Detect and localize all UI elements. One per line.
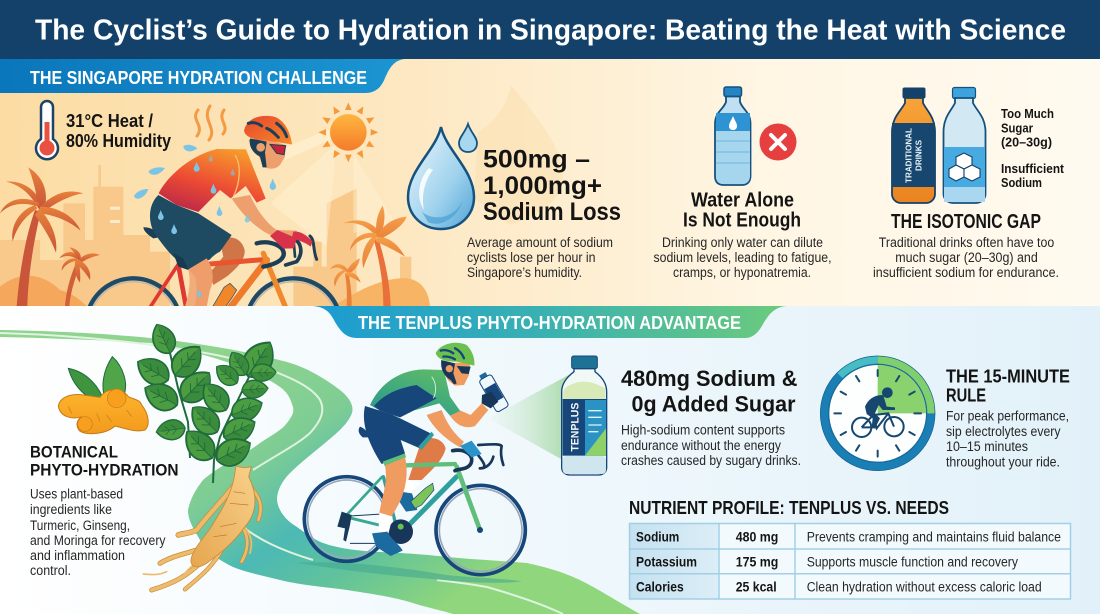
text: botanical phyto-hydration: Turmeric, Ginseng, [30, 518, 130, 533]
text: sodium and sugar: 480mg Sodium & [621, 366, 798, 391]
sugar bottle [944, 88, 986, 203]
text: water alone is not enough: cramps, or hyponatremia. [673, 265, 811, 280]
row: sodium: 480 mg [736, 528, 778, 544]
bike wheels [88, 276, 339, 306]
orange bottle [892, 88, 935, 203]
rear leg [209, 238, 245, 285]
row: potassium: Potassium [636, 554, 697, 570]
text: botanical phyto-hydration [30, 442, 178, 578]
rear arm [427, 410, 464, 447]
text: sodium and sugar: endurance without the energy [621, 438, 781, 453]
panel: Singapore hydration challenge [0, 102, 430, 374]
stat: sodium loss: Sodium Loss [483, 198, 621, 226]
text: sodium and sugar [621, 366, 801, 468]
bottle on frame [212, 282, 237, 306]
row: sodium: Sodium [636, 528, 679, 544]
row: potassium: Supports muscle function and recovery [807, 554, 1018, 570]
icon: moringa branches [132, 320, 281, 483]
text: sodium and sugar: 0g Added Sugar [632, 392, 796, 416]
winding road [0, 330, 640, 614]
bottle annotations: Too Much [1001, 106, 1054, 121]
text: botanical phyto-hydration: Uses plant-based [30, 486, 123, 502]
text: the 15-minute rule: 10–15 minutes [946, 439, 1028, 454]
text: the isotonic gap [873, 211, 1059, 280]
title: The Cyclist’s Guide to Hydration in Singapore: Beating the Heat with Science [35, 14, 1066, 46]
arm [232, 195, 300, 238]
rear leg [408, 438, 446, 480]
text: the 15-minute rule: For peak performance, [946, 408, 1069, 424]
illustration: cyclist drinking [297, 343, 525, 583]
icon: sodium droplets [408, 124, 477, 229]
stat: sodium loss: cyclists lose per hour in [467, 250, 596, 265]
bike wheels [304, 477, 525, 575]
text: the 15-minute rule [946, 366, 1070, 470]
orange bottle: DRINKS [914, 140, 924, 171]
sweat drops [134, 145, 276, 297]
stat: sodium loss: 1,000mg+ [483, 172, 602, 200]
text: water alone is not enough: Is Not Enough [683, 210, 801, 232]
helmet [244, 116, 292, 144]
icon: sun [318, 102, 378, 162]
text: botanical phyto-hydration: PHYTO-HYDRATION [30, 460, 178, 480]
text: botanical phyto-hydration: and Moringa for recovery [30, 533, 166, 548]
bike frame [148, 253, 287, 310]
cyclist silhouette [852, 387, 904, 437]
table: nutrient profile [630, 524, 1070, 599]
handlebars [453, 444, 503, 471]
jersey [370, 369, 461, 417]
text: botanical phyto-hydration: and inflammation [30, 548, 125, 563]
head [248, 138, 286, 169]
text: water alone is not enough: Water Alone [691, 190, 794, 212]
banner: Tenplus advantage: THE TENPLUS PHYTO-HYDRATION ADVANTAGE [358, 313, 741, 333]
text: botanical phyto-hydration: BOTANICAL [30, 442, 118, 462]
stat: sodium loss: Singapore’s humidity. [467, 265, 582, 280]
banner: Singapore hydration challenge: THE SINGAPORE HYDRATION CHALLENGE [30, 68, 367, 88]
bottle annotations: (20–30g) [1001, 134, 1052, 150]
icon: ginseng root [143, 466, 261, 590]
text: botanical phyto-hydration: control. [30, 563, 71, 578]
text: the 15-minute rule: sip electrolytes every [946, 424, 1061, 439]
stat: sodium loss: 500mg – [483, 146, 590, 174]
icon: right palm trees [330, 206, 407, 306]
text: the 15-minute rule: RULE [946, 386, 986, 406]
stat: heat and humidity: 80% Humidity [66, 131, 171, 151]
row: calories: Clean hydration without excess caloric load [807, 579, 1042, 594]
text: water alone is not enough: sodium levels, leading to fatigue, [654, 250, 832, 265]
icon: traditional drink bottles [892, 88, 1065, 203]
text: botanical phyto-hydration: ingredients like [30, 502, 112, 517]
row: calories: 25 kcal [736, 578, 777, 594]
text: water alone is not enough: Drinking only water can dilute [662, 235, 823, 250]
banner: Singapore hydration challenge [0, 59, 405, 93]
text: water alone is not enough [654, 190, 832, 280]
text: the isotonic gap: THE ISOTONIC GAP [891, 211, 1041, 233]
shorts [150, 195, 232, 270]
panel: Tenplus phyto-hydration advantage [0, 306, 1070, 614]
decorative soft flame [474, 85, 563, 225]
helmet [436, 343, 474, 366]
icon: 15-minute clock [820, 356, 935, 471]
heading: nutrient profile: NUTRIENT PROFILE: TENPLUS VS. NEEDS [629, 498, 949, 518]
row: calories: Calories [636, 578, 684, 594]
front arm with bottle [450, 403, 488, 427]
scene: city skyline, palms and sun [0, 102, 430, 306]
front leg [184, 258, 213, 310]
icon: large palm tree [0, 167, 83, 306]
illustration: cyclist in heat [88, 116, 339, 306]
bottle annotations: Sodium [1001, 175, 1042, 190]
handlebars [257, 236, 317, 267]
icon: turmeric [58, 357, 148, 434]
bottle annotations: Insufficient [1001, 161, 1065, 176]
stat: sodium loss: Average amount of sodium [467, 235, 613, 250]
orange bottle: TRADITIONAL [904, 128, 914, 183]
icon: thermometer [36, 101, 58, 159]
saddle [143, 227, 158, 238]
icon: Tenplus bottle with beam [488, 356, 607, 475]
handheld bottle [476, 370, 509, 413]
text: the isotonic gap: Traditional drinks often have too [879, 235, 1054, 250]
row: sodium [636, 528, 1061, 544]
icon: water bottle with cross [715, 87, 796, 185]
section background: Tenplus advantage [0, 306, 1100, 614]
text: the 15-minute rule: throughout your ride. [946, 454, 1060, 470]
stat: sodium loss [467, 146, 621, 280]
icon: Tenplus bottle with beam: TENPLUS [570, 403, 582, 452]
row: potassium [636, 554, 1018, 570]
jersey [159, 149, 266, 212]
row: potassium: 175 mg [736, 554, 778, 570]
shorts and front leg [364, 406, 431, 464]
head [442, 363, 470, 386]
row: sodium: Prevents cramping and maintains fluid balance [807, 530, 1061, 544]
icon: heat waves [196, 106, 225, 140]
icon: small palm tree [59, 247, 100, 306]
text: the isotonic gap: much sugar (20–30g) and [895, 250, 1038, 265]
text: sodium and sugar: crashes caused by sugary drinks. [621, 453, 801, 468]
bottle annotations [1001, 106, 1065, 190]
section background: Singapore challenge [0, 59, 1100, 306]
banner: Tenplus advantage [313, 306, 787, 338]
bottle on frame [411, 483, 434, 508]
text: sodium and sugar: High-sodium content supports [621, 422, 785, 438]
bike frame [345, 464, 480, 530]
row: calories [636, 578, 1042, 594]
text: the 15-minute rule: THE 15-MINUTE [946, 366, 1070, 386]
title bar [0, 0, 1100, 59]
bottle annotations: Sugar [1001, 120, 1033, 136]
stat: heat and humidity [66, 111, 171, 151]
stat: heat and humidity: 31°C Heat / [66, 111, 153, 131]
text: the isotonic gap: insufficient sodium for endurance. [873, 265, 1059, 280]
